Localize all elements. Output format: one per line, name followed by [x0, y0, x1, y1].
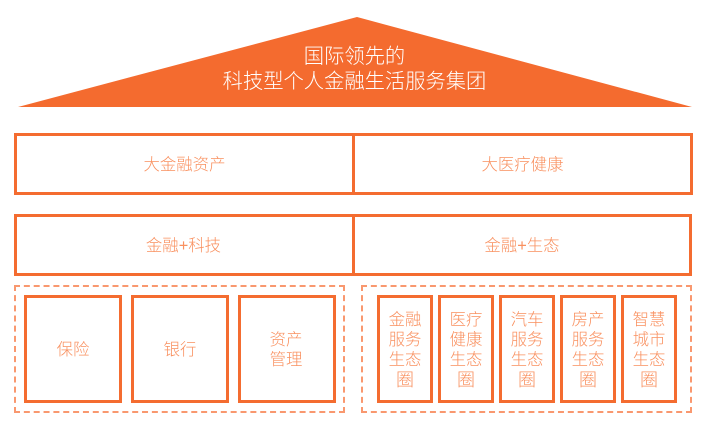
box: 金融服务生态圈	[377, 295, 433, 403]
box: 汽车服务生态圈: 服务	[511, 330, 543, 348]
box: 智慧城市生态圈: 智慧	[633, 310, 665, 328]
box: 智慧城市生态圈: 城市	[633, 330, 665, 348]
box: 智慧城市生态圈	[621, 295, 677, 403]
box: 医疗健康生态圈: 医疗	[450, 310, 482, 328]
box: 资产管理: 资产	[270, 331, 302, 349]
title: 国际领先的	[304, 46, 405, 68]
title	[223, 46, 486, 93]
roof triangle	[18, 17, 692, 107]
box: 汽车服务生态圈: 生态	[511, 350, 543, 368]
panel: 金融+生态	[352, 214, 692, 276]
box: 智慧城市生态圈: 生态	[633, 350, 665, 368]
box: 金融服务生态圈: 圈	[396, 370, 414, 390]
box: 金融服务生态圈: 生态	[389, 350, 421, 368]
box: 保险: 保险	[57, 341, 89, 359]
panel: 金融+科技	[14, 214, 355, 276]
box: 房产服务生态圈: 圈	[579, 370, 597, 390]
box: 金融服务生态圈: 服务	[389, 330, 421, 348]
dashed group: financial services	[14, 285, 345, 413]
box: 银行	[131, 295, 229, 403]
box: 资产管理: 管理	[270, 351, 302, 369]
panel: 大金融资产	[14, 133, 355, 195]
box: 汽车服务生态圈: 圈	[518, 370, 536, 390]
box: 房产服务生态圈: 房产	[572, 310, 604, 328]
box: 智慧城市生态圈: 圈	[640, 370, 658, 390]
box: 资产管理	[238, 295, 336, 403]
box: 房产服务生态圈	[560, 295, 616, 403]
panel: 大医疗健康	[352, 133, 693, 195]
box: 银行: 银行	[164, 341, 196, 359]
panel: 大金融资产: 大金融资产	[144, 156, 225, 174]
title: 科技型个人金融生活服务集团	[223, 71, 486, 93]
box: 保险	[24, 295, 122, 403]
box: 汽车服务生态圈	[499, 295, 555, 403]
panel: 金融+生态: 金融+生态	[484, 237, 560, 255]
box: 汽车服务生态圈: 汽车	[511, 310, 543, 328]
box: 医疗健康生态圈: 圈	[457, 370, 475, 390]
panel: 金融+科技: 金融+科技	[146, 237, 221, 255]
box: 金融服务生态圈: 金融	[389, 310, 421, 328]
box: 医疗健康生态圈	[438, 295, 494, 403]
panel: 大医疗健康: 大医疗健康	[482, 156, 563, 174]
dashed group: ecosystems	[361, 285, 692, 413]
box: 医疗健康生态圈: 生态	[450, 350, 482, 368]
box: 房产服务生态圈: 生态	[572, 350, 604, 368]
box: 房产服务生态圈: 服务	[572, 330, 604, 348]
box: 医疗健康生态圈: 健康	[450, 330, 482, 348]
